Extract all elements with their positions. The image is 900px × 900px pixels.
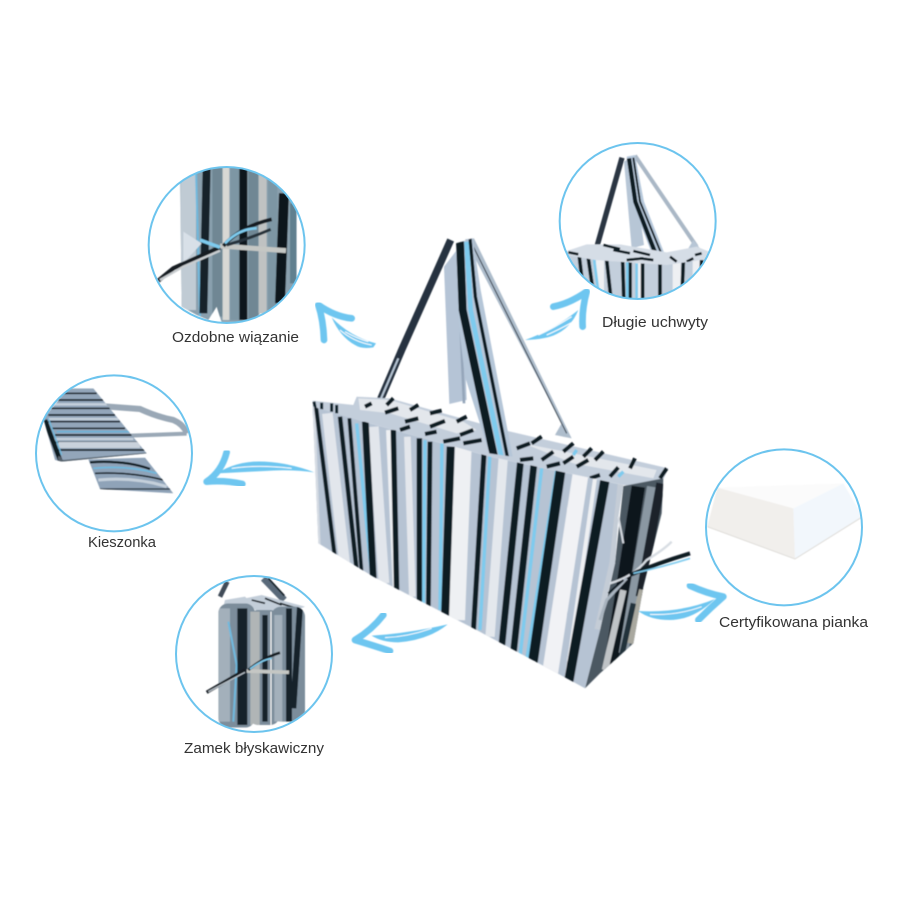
panel: zipper detail [176, 576, 332, 732]
label: zipper: Zamek błyskawiczny [184, 740, 324, 757]
label: long handles: Długie uchwyty [602, 314, 709, 331]
arrow to long handles [525, 292, 587, 340]
arrow to pocket [207, 452, 314, 484]
front handle strap [455, 238, 512, 457]
label: pocket: Kieszonka [88, 534, 157, 551]
label: decorative tie: Ozdobne wiązanie [172, 329, 299, 346]
panel: pocket detail [36, 375, 192, 531]
right thin handle strap [465, 238, 572, 438]
panel: decorative tie detail [149, 163, 305, 327]
arrow to foam [638, 586, 723, 620]
side ties [600, 517, 690, 620]
tie bow [158, 219, 286, 281]
mat top surface [313, 397, 668, 487]
back handle strap [444, 245, 467, 404]
label: certified foam: Certyfikowana pianka [719, 614, 869, 631]
left thin handle strap [372, 240, 451, 420]
infographic canvas [35, 142, 868, 756]
product: striped folding mat with handles [310, 237, 690, 697]
mat side with folded edges [583, 477, 670, 690]
strap loop [105, 406, 187, 436]
arrow to decorative tie [318, 305, 376, 348]
arrow to zipper [355, 615, 448, 651]
panel: certified foam detail [706, 449, 863, 605]
panel: long handles detail [560, 143, 716, 308]
mat front face with vertical stripes [310, 397, 630, 697]
